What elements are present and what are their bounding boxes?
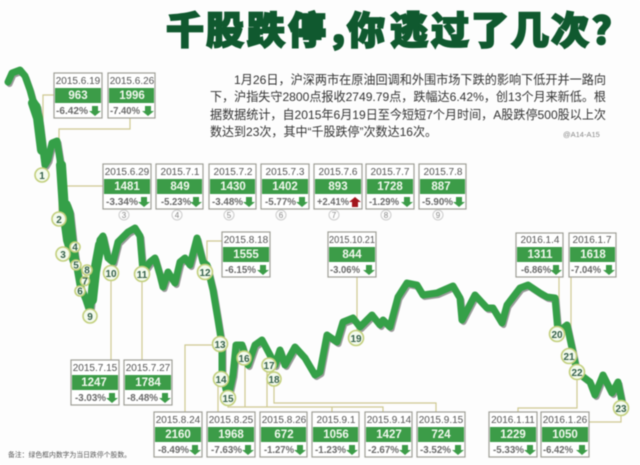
card: 2015.7.2: -3.48%	[212, 196, 244, 208]
title: 千股跌停，你逃过了几次？	[166, 11, 630, 53]
circled labels under cards: 7	[332, 211, 337, 220]
card: 2016.1.4: 1311	[528, 249, 553, 261]
numbered markers: 18	[268, 375, 280, 386]
card: 2015.7.6	[314, 164, 362, 209]
card: 2015.7.27: -8.48%	[127, 392, 159, 404]
footnote: 备注：绿色框内数字为当日跌停个股数。	[8, 450, 131, 459]
card: 2016.1.26	[541, 412, 589, 457]
card: 2016.1.4	[516, 233, 563, 277]
numbered markers: 4	[72, 242, 78, 254]
card: 2015.7.1	[156, 164, 203, 209]
numbered markers: 8	[84, 266, 90, 276]
card: 2015.7.8: -5.90%	[422, 196, 454, 208]
card: 2016.1.26: -6.42%	[543, 444, 574, 456]
card: 2015.8.24: -8.49%	[158, 444, 190, 456]
card: 2015.7.7: -1.29%	[369, 196, 400, 208]
numbered markers: 21	[563, 352, 575, 363]
card: 2016.1.11: 2016.1.11	[491, 415, 535, 426]
card: 2015.7.27: 1784	[135, 377, 161, 389]
numbered markers: 16	[238, 354, 250, 365]
card: 2015.7.15: 2015.7.15	[73, 363, 118, 374]
card: 2015.9.14: -2.67%	[368, 444, 400, 456]
numbered markers: 2	[56, 215, 62, 226]
card: 2015.9.15: 724	[431, 429, 451, 441]
numbered markers: 5	[73, 260, 79, 272]
card: 2015.8.25: 1968	[218, 429, 244, 441]
card: 2015.7.3: -5.77%	[265, 196, 297, 208]
card: 2015.9.15: 2015.9.15	[419, 415, 464, 426]
circled labels under cards	[119, 210, 443, 220]
numbered markers: 3	[60, 250, 66, 261]
numbered markers: 13	[214, 340, 226, 351]
card: 2015.10.21	[328, 232, 376, 277]
card: 2016.1.7: 1618	[580, 249, 606, 261]
card: 2015.8.24: 2015.8.24	[156, 415, 201, 426]
circled labels under cards: 6	[279, 211, 284, 220]
card: 2015.6.19: 2015.6.19	[56, 76, 101, 87]
circled labels under cards: 3	[122, 211, 127, 220]
card: 2015.7.15: 1247	[81, 377, 107, 389]
numbered markers: 22	[571, 368, 583, 379]
card: 2015.6.19: 963	[68, 90, 88, 102]
card: 2016.1.26: 2016.1.26	[543, 415, 588, 426]
card: 2015.7.15: -3.03%	[75, 392, 107, 404]
intro text block: 下，沪指失守2800点报收2749.79点，跌幅达6.42%，创13个月来新低。根	[210, 89, 606, 104]
card: 2016.1.11: 1229	[500, 429, 526, 441]
card: 2015.6.19: -6.42%	[56, 105, 89, 117]
card: 2015.7.2: 1430	[220, 181, 246, 193]
card: 2016.1.4: -6.86%	[521, 264, 552, 276]
intro text block: 数达到23次，其中“千股跌停”次数达16次。	[210, 124, 437, 139]
numbered markers: 12	[199, 268, 211, 279]
card: 2015.6.29: 1481	[114, 181, 140, 193]
card: 2016.1.7: -7.04%	[571, 264, 602, 276]
card: 2015.7.1: 849	[170, 181, 190, 193]
card: 2015.8.26: -1.27%	[264, 444, 295, 456]
numbered markers: 6	[77, 286, 83, 298]
card: 2015.8.18	[222, 232, 270, 277]
thick early crash segment	[33, 103, 100, 300]
card: 2015.7.2	[209, 164, 256, 209]
card: 2015.8.26: 672	[274, 429, 294, 441]
card: 2015.7.8: 887	[431, 181, 451, 193]
card: 2015.7.3: 1402	[272, 181, 298, 193]
circled labels under cards: 9	[436, 211, 441, 220]
card: 2015.8.18: 1555	[233, 249, 259, 261]
card: 2015.8.26: 2015.8.26	[262, 415, 307, 426]
card: 2015.9.1: 1056	[323, 429, 349, 441]
card: 2015.8.26	[260, 412, 307, 457]
line shadow	[10, 72, 624, 404]
card: 2015.9.15	[417, 412, 465, 457]
card: 2015.10.21: -3.06%	[330, 264, 361, 276]
card: 2015.6.19	[54, 73, 102, 118]
card: 2015.8.18: -6.15%	[225, 264, 257, 276]
card: 2015.7.3: 2015.7.3	[266, 167, 305, 178]
leader lines	[43, 95, 621, 422]
numbered markers: 20	[551, 330, 563, 341]
card: 2015.6.26: 1996	[119, 90, 145, 102]
card: 2015.6.26: -7.40%	[110, 105, 141, 117]
card: 2015.10.21: 2015.10.21	[329, 235, 375, 246]
intro text block: 据数据统计，自2015年6月19日至今短短7个月时间，A股跌停500股以上次	[210, 107, 606, 122]
card: 2015.8.25	[207, 412, 255, 457]
numbered markers: 17	[263, 361, 275, 372]
line main	[8, 70, 622, 402]
card: 2015.7.2: 2015.7.2	[214, 167, 253, 178]
numbered markers: 7	[82, 276, 88, 288]
circled labels under cards: 4	[175, 211, 180, 220]
card: 2015.7.7: 2015.7.7	[371, 167, 410, 178]
circled labels under cards: 8	[384, 211, 389, 220]
card: 2015.9.14: 1427	[376, 429, 402, 441]
card: 2015.8.18: 2015.8.18	[224, 235, 269, 246]
card: 2015.7.6: 893	[328, 181, 348, 193]
card: 2015.7.6: 2015.7.6	[319, 167, 358, 178]
card: 2015.6.26: 2015.6.26	[110, 76, 155, 87]
numbered markers: 1	[39, 171, 45, 182]
card: 2015.9.1: -1.23%	[315, 444, 347, 456]
intro text block: 1月26日，沪深两市在原油回调和外围市场下跌的影响下低开并一路向	[234, 72, 606, 87]
card: 2015.10.21: 844	[342, 249, 362, 261]
card: 2015.7.1: 2015.7.1	[161, 167, 200, 178]
numbered markers: 11	[137, 270, 148, 281]
source reference: @A14-A15	[563, 130, 600, 139]
circled labels under cards: 5	[227, 211, 232, 220]
card: 2015.7.7: 1728	[377, 181, 403, 193]
numbered markers	[35, 168, 628, 416]
card: 2015.8.24	[154, 412, 202, 457]
numbered markers: 19	[350, 334, 362, 345]
card: 2015.9.15: -3.52%	[420, 444, 452, 456]
numbered markers: 23	[615, 404, 627, 415]
stock index line chart	[8, 70, 624, 404]
card: 2015.7.8	[419, 164, 466, 209]
card: 2015.7.8: 2015.7.8	[424, 167, 463, 178]
card: 2016.1.7	[569, 233, 616, 277]
card: 2016.1.11: -5.33%	[493, 444, 525, 456]
card: 2015.6.29: 2015.6.29	[105, 167, 150, 178]
card: 2015.7.6: +2.41%	[317, 196, 350, 208]
card: 2015.9.1: 2015.9.1	[317, 415, 356, 426]
card: 2015.8.25: 2015.8.25	[209, 415, 254, 426]
card: 2016.1.4: 2016.1.4	[521, 235, 560, 246]
card: 2015.6.26	[108, 73, 155, 118]
card: 2016.1.26: 1050	[552, 429, 578, 441]
card: 2015.9.14	[365, 412, 412, 457]
card: 2015.7.7	[366, 164, 414, 209]
card: 2016.1.11	[489, 412, 537, 457]
numbered markers: 14	[215, 375, 227, 386]
card: 2015.8.25: -7.63%	[211, 444, 243, 456]
card: 2015.7.27: 2015.7.27	[126, 363, 171, 374]
card: 2015.7.15	[71, 360, 119, 405]
card: 2015.7.27	[124, 360, 172, 405]
card: 2015.8.24: 2160	[165, 429, 191, 441]
numbered markers: 10	[105, 269, 117, 280]
card: 2015.7.1: -5.23%	[161, 196, 192, 208]
numbered markers: 15	[222, 394, 234, 405]
card: 2015.7.3	[261, 164, 309, 209]
card: 2015.9.1	[312, 412, 359, 457]
card: 2015.6.29	[103, 164, 151, 209]
card: 2016.1.7: 2016.1.7	[573, 235, 612, 246]
intro text block	[210, 72, 606, 139]
card: 2015.9.14: 2015.9.14	[367, 415, 412, 426]
card: 2015.6.29: -3.34%	[106, 196, 139, 208]
numbered markers: 9	[87, 312, 93, 323]
